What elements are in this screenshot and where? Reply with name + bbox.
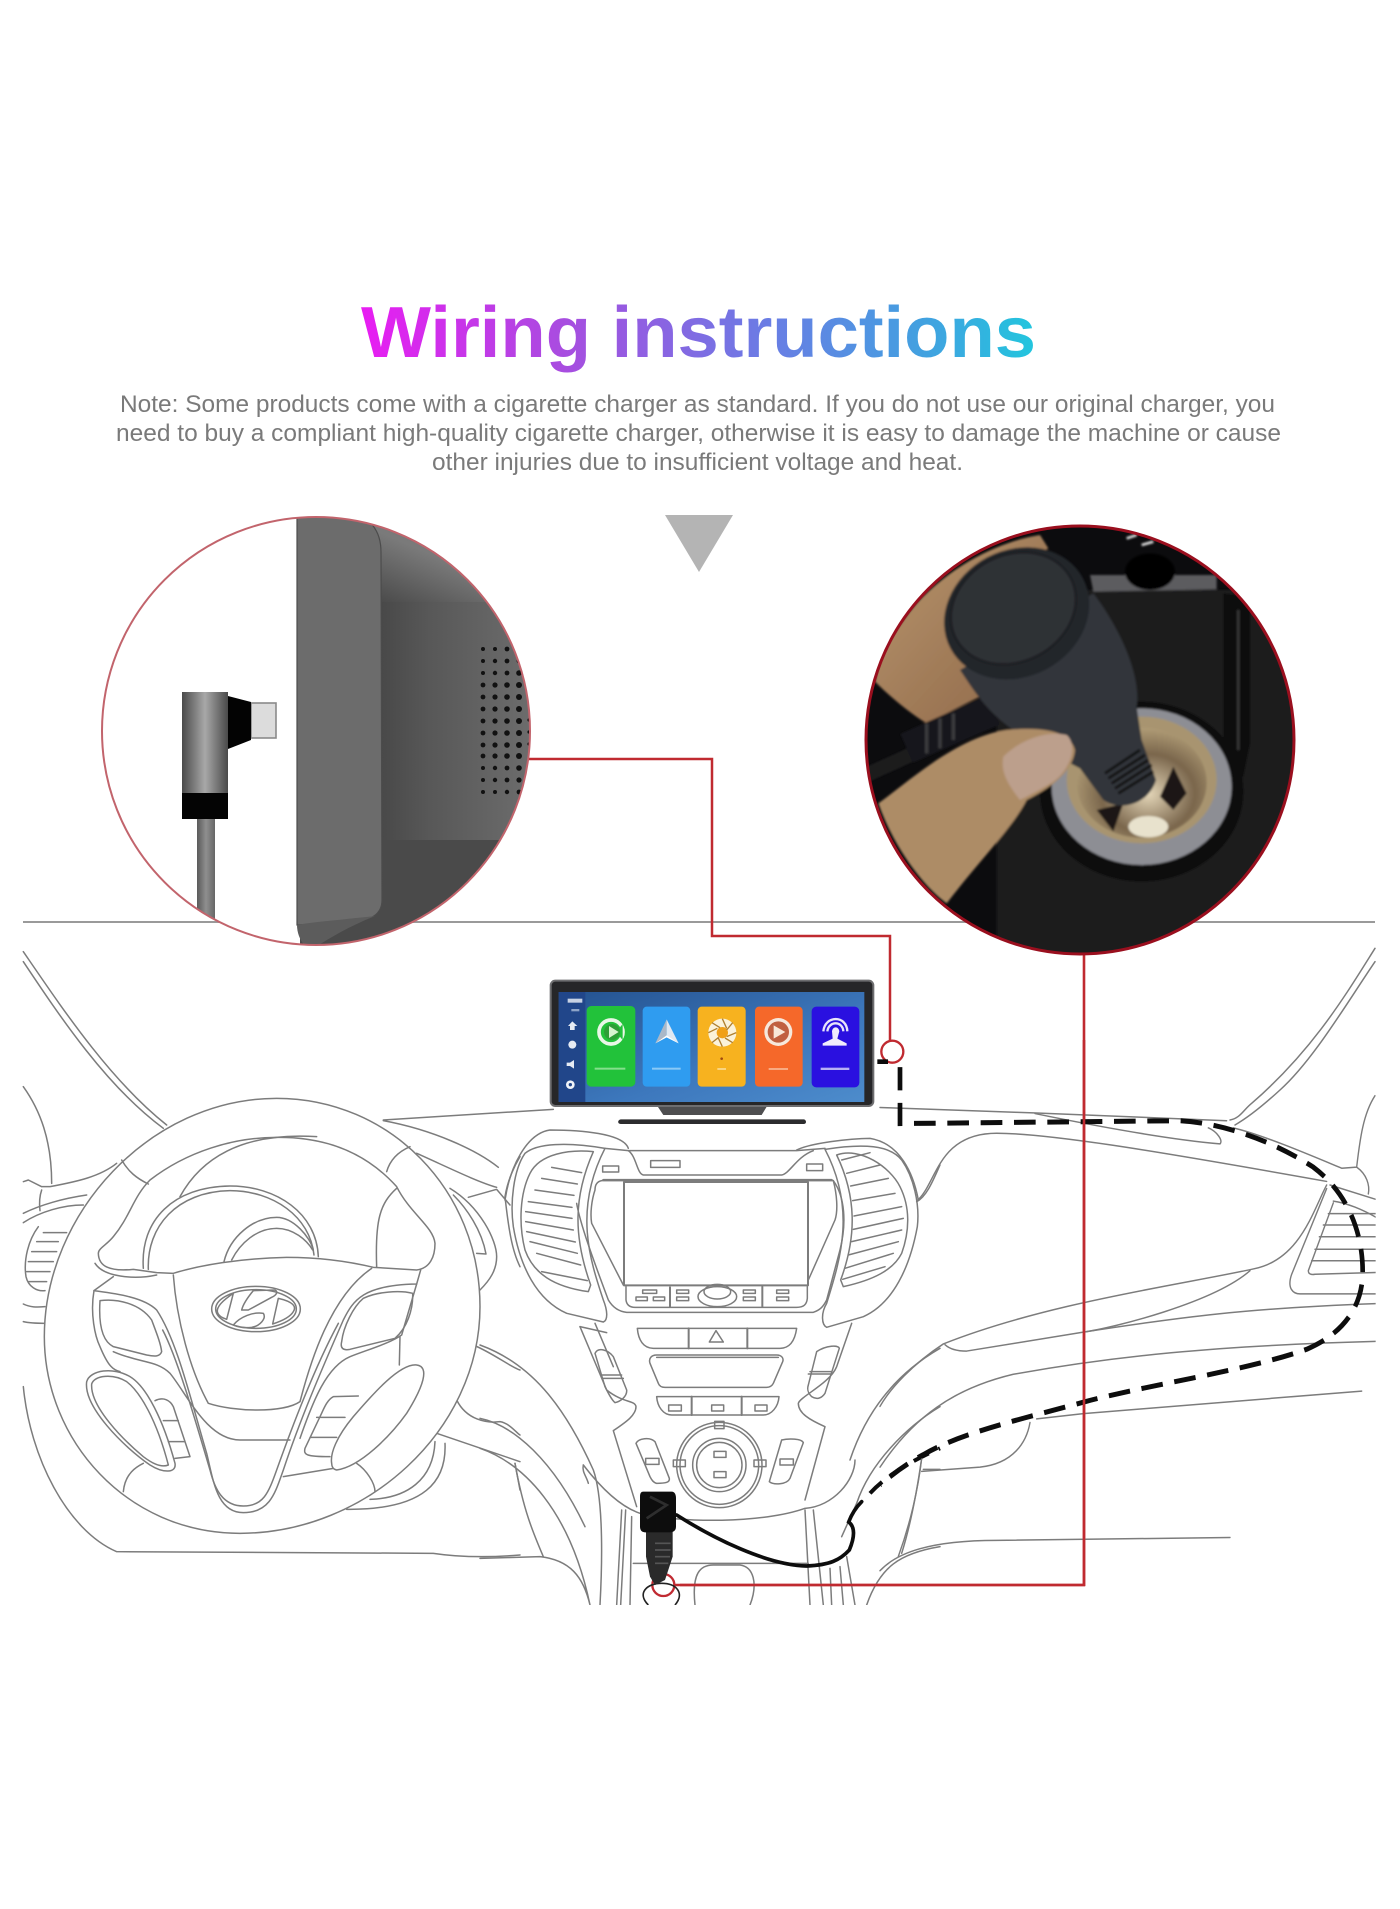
dark dashboard texture [997, 590, 1297, 957]
screen surround [591, 1181, 837, 1285]
upper finger [875, 535, 1048, 723]
arrow: downward triangle [665, 515, 733, 572]
card: purple [812, 1007, 859, 1087]
card: orange [755, 1007, 803, 1087]
red vertical line overlay [1083, 1040, 1085, 1586]
right button pad [341, 1292, 413, 1350]
thumb nail [1003, 734, 1072, 800]
right spoke lower [283, 1284, 417, 1477]
bezel [551, 981, 873, 1106]
wire start stub [877, 1059, 888, 1064]
brand logo [212, 1286, 300, 1332]
illustration: dashboard right side [880, 1067, 1376, 1571]
left rocker buttons [155, 1399, 190, 1458]
device side bezel [297, 510, 382, 925]
hub top outline [98, 1137, 435, 1273]
steering wheel [44, 1098, 480, 1533]
seats right [842, 1348, 940, 1605]
socket black outline [643, 1583, 679, 1605]
right rocker buttons [305, 1396, 358, 1457]
hazard button row [637, 1328, 797, 1348]
instrument arcs [180, 1136, 317, 1197]
red connector: cigarette socket circle to plug [680, 955, 1084, 1585]
climate dial [673, 1421, 766, 1508]
right thumb pod [331, 1365, 424, 1470]
wide slot [650, 1355, 783, 1387]
housing bottom shade [300, 840, 499, 944]
head unit controls [626, 1284, 807, 1307]
horizon divider line [23, 921, 1375, 923]
note text: need to buy a compliant high-quality cigarette charger, otherwise it is easy to damage the machine or cause [116, 420, 1281, 447]
centre tunnel [617, 1510, 855, 1605]
console side edges [580, 1327, 637, 1507]
panel: cigarette socket photo circle [866, 522, 1297, 957]
circle outline [866, 526, 1294, 954]
wheel rim [44, 1098, 480, 1533]
left spoke lower [93, 1291, 290, 1440]
stand neck [656, 1104, 768, 1115]
card: yellow [698, 1007, 746, 1087]
head unit screen [624, 1182, 808, 1285]
note text: other injuries due to insufficient voltage and heat. [432, 449, 963, 476]
housing top highlight [374, 526, 482, 600]
thumb [878, 729, 1075, 903]
slot cut-out [1125, 553, 1175, 590]
top slot strip [1090, 575, 1217, 592]
wire: dashes to plug [870, 1448, 940, 1493]
left button pad [100, 1300, 162, 1356]
USB-C plug tongue [251, 703, 276, 738]
lower bezel lip [297, 916, 374, 944]
charger cap face [954, 555, 1074, 662]
socket inner rim [1067, 717, 1217, 843]
card: green [587, 1006, 635, 1087]
note text [116, 391, 1281, 476]
charger vent ribs [1105, 750, 1153, 793]
left vent housing [505, 1130, 628, 1333]
three buttons row [657, 1397, 779, 1415]
socket red marker [652, 1574, 674, 1596]
device rear housing [382, 602, 529, 840]
stand base [618, 1119, 806, 1124]
right vent housing [797, 1138, 940, 1327]
top panel [605, 1148, 825, 1175]
card: blue [643, 1007, 690, 1087]
socket surround [1040, 702, 1243, 882]
interior shadows [1097, 767, 1187, 832]
charger body [960, 593, 1156, 806]
bright contact spot [1128, 816, 1168, 837]
top panel buttons [603, 1161, 823, 1172]
illustration: dashboard left side and steering wheel [23, 1087, 553, 1557]
speaker grille [481, 647, 531, 794]
spoke outer frame [94, 1270, 421, 1513]
charger head [942, 546, 1090, 680]
connector black boot [182, 793, 228, 819]
title: Wiring instructions [361, 293, 1036, 373]
power-in red marker [881, 1041, 903, 1063]
white dashboard specks [1127, 535, 1153, 545]
cable [867, 752, 917, 775]
red horizontal line overlay [675, 1584, 1085, 1586]
panel: USB-C port detail circle [102, 510, 540, 950]
illustration: centre console [480, 1130, 940, 1605]
circle outline [102, 517, 530, 945]
note text: Note: Some products come with a cigarette charger as standard. If you do not use our original charger, you [120, 391, 1275, 418]
illustration: left A-pillar [23, 952, 167, 1128]
seats left [480, 1345, 602, 1605]
left thumb pod [86, 1371, 175, 1471]
wire: solid from plug [677, 1502, 862, 1566]
wire: dashed dashboard route [880, 1067, 1363, 1485]
socket grey ring [1052, 708, 1232, 865]
spoke inner frame [163, 1323, 338, 1506]
left pillar and dash lines [23, 1087, 553, 1557]
rim segments [122, 1147, 410, 1492]
socket metal interior [1077, 728, 1207, 838]
airbag centre [173, 1268, 372, 1410]
connector metal barrel [182, 692, 228, 794]
display: dash-mounted screen [551, 981, 903, 1124]
braided cable [197, 819, 215, 919]
charger plug [640, 1492, 676, 1585]
lower console curve [583, 1460, 855, 1520]
sidebar [559, 992, 585, 1102]
red connector: display to USB-C circle [525, 759, 890, 1041]
cable strain relief [907, 710, 993, 748]
USB-C black collar [228, 696, 251, 749]
side buttons [636, 1439, 669, 1483]
illustration: right A-pillar [1230, 948, 1375, 1125]
screen [559, 992, 864, 1102]
vertical trim edge [1223, 593, 1250, 777]
